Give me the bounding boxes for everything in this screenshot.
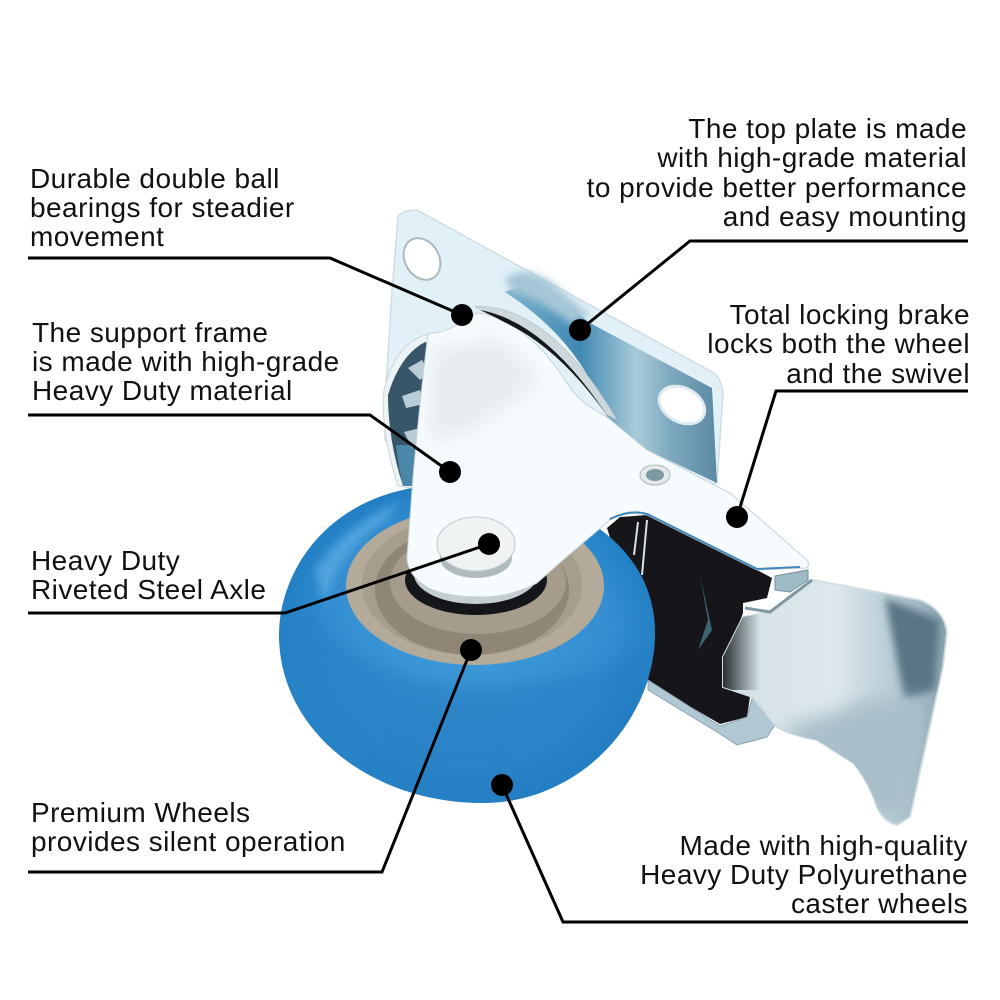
callout: riveted axle: Riveted Steel Axle [31, 574, 266, 605]
callout: riveted axle: Heavy Duty [31, 545, 180, 576]
callout: polyurethane caster wheels: Made with high-quality [680, 830, 968, 861]
side swivel housing with bolts [383, 335, 440, 490]
bearing race arc [475, 306, 617, 420]
callout: top plate: The top plate is made [688, 113, 967, 144]
callout: locking brake: and the swivel [786, 358, 970, 389]
pedal hinge wire [745, 570, 812, 612]
blue polyurethane wheel [279, 485, 655, 803]
callout: support frame [28, 317, 461, 483]
callout: support frame: The support frame [32, 317, 268, 348]
callout: premium wheels: Premium Wheels [31, 797, 250, 828]
callout: double ball bearings: Durable double ball [30, 163, 280, 194]
caster wheel product illustration [279, 210, 947, 825]
callout: locking brake: locks both the wheel [707, 328, 970, 359]
callout: top plate: and easy mounting [723, 201, 967, 232]
top mounting plate [385, 210, 723, 500]
callout: double ball bearings [28, 163, 473, 326]
callout: polyurethane caster wheels: Heavy Duty Polyurethane [640, 859, 968, 890]
callout: premium wheels: provides silent operation [31, 826, 346, 857]
callout: support frame: is made with high-grade [32, 346, 340, 377]
callout: support frame: Heavy Duty material [32, 375, 293, 406]
callout: locking brake: Total locking brake [730, 299, 970, 330]
brake pedal paddle [720, 570, 947, 825]
callout: top plate [569, 113, 968, 341]
callout: double ball bearings: bearings for steadier [30, 192, 295, 223]
rear brake bracket, dark interior [607, 515, 775, 745]
axle rivet head [437, 517, 515, 578]
callout: locking brake [707, 299, 970, 528]
small rivet on brake arm [640, 465, 670, 485]
callout: riveted axle [28, 533, 500, 613]
support frame and brake arm [407, 306, 808, 597]
callout: polyurethane caster wheels [491, 774, 968, 922]
callout: premium wheels [28, 639, 482, 872]
callout: top plate: to provide better performance [587, 172, 967, 203]
tan wheel hub and bearing [346, 507, 604, 665]
callout: polyurethane caster wheels: caster wheels [791, 888, 968, 919]
callout: double ball bearings: movement [30, 221, 164, 252]
callout: top plate: with high-grade material [656, 142, 967, 173]
